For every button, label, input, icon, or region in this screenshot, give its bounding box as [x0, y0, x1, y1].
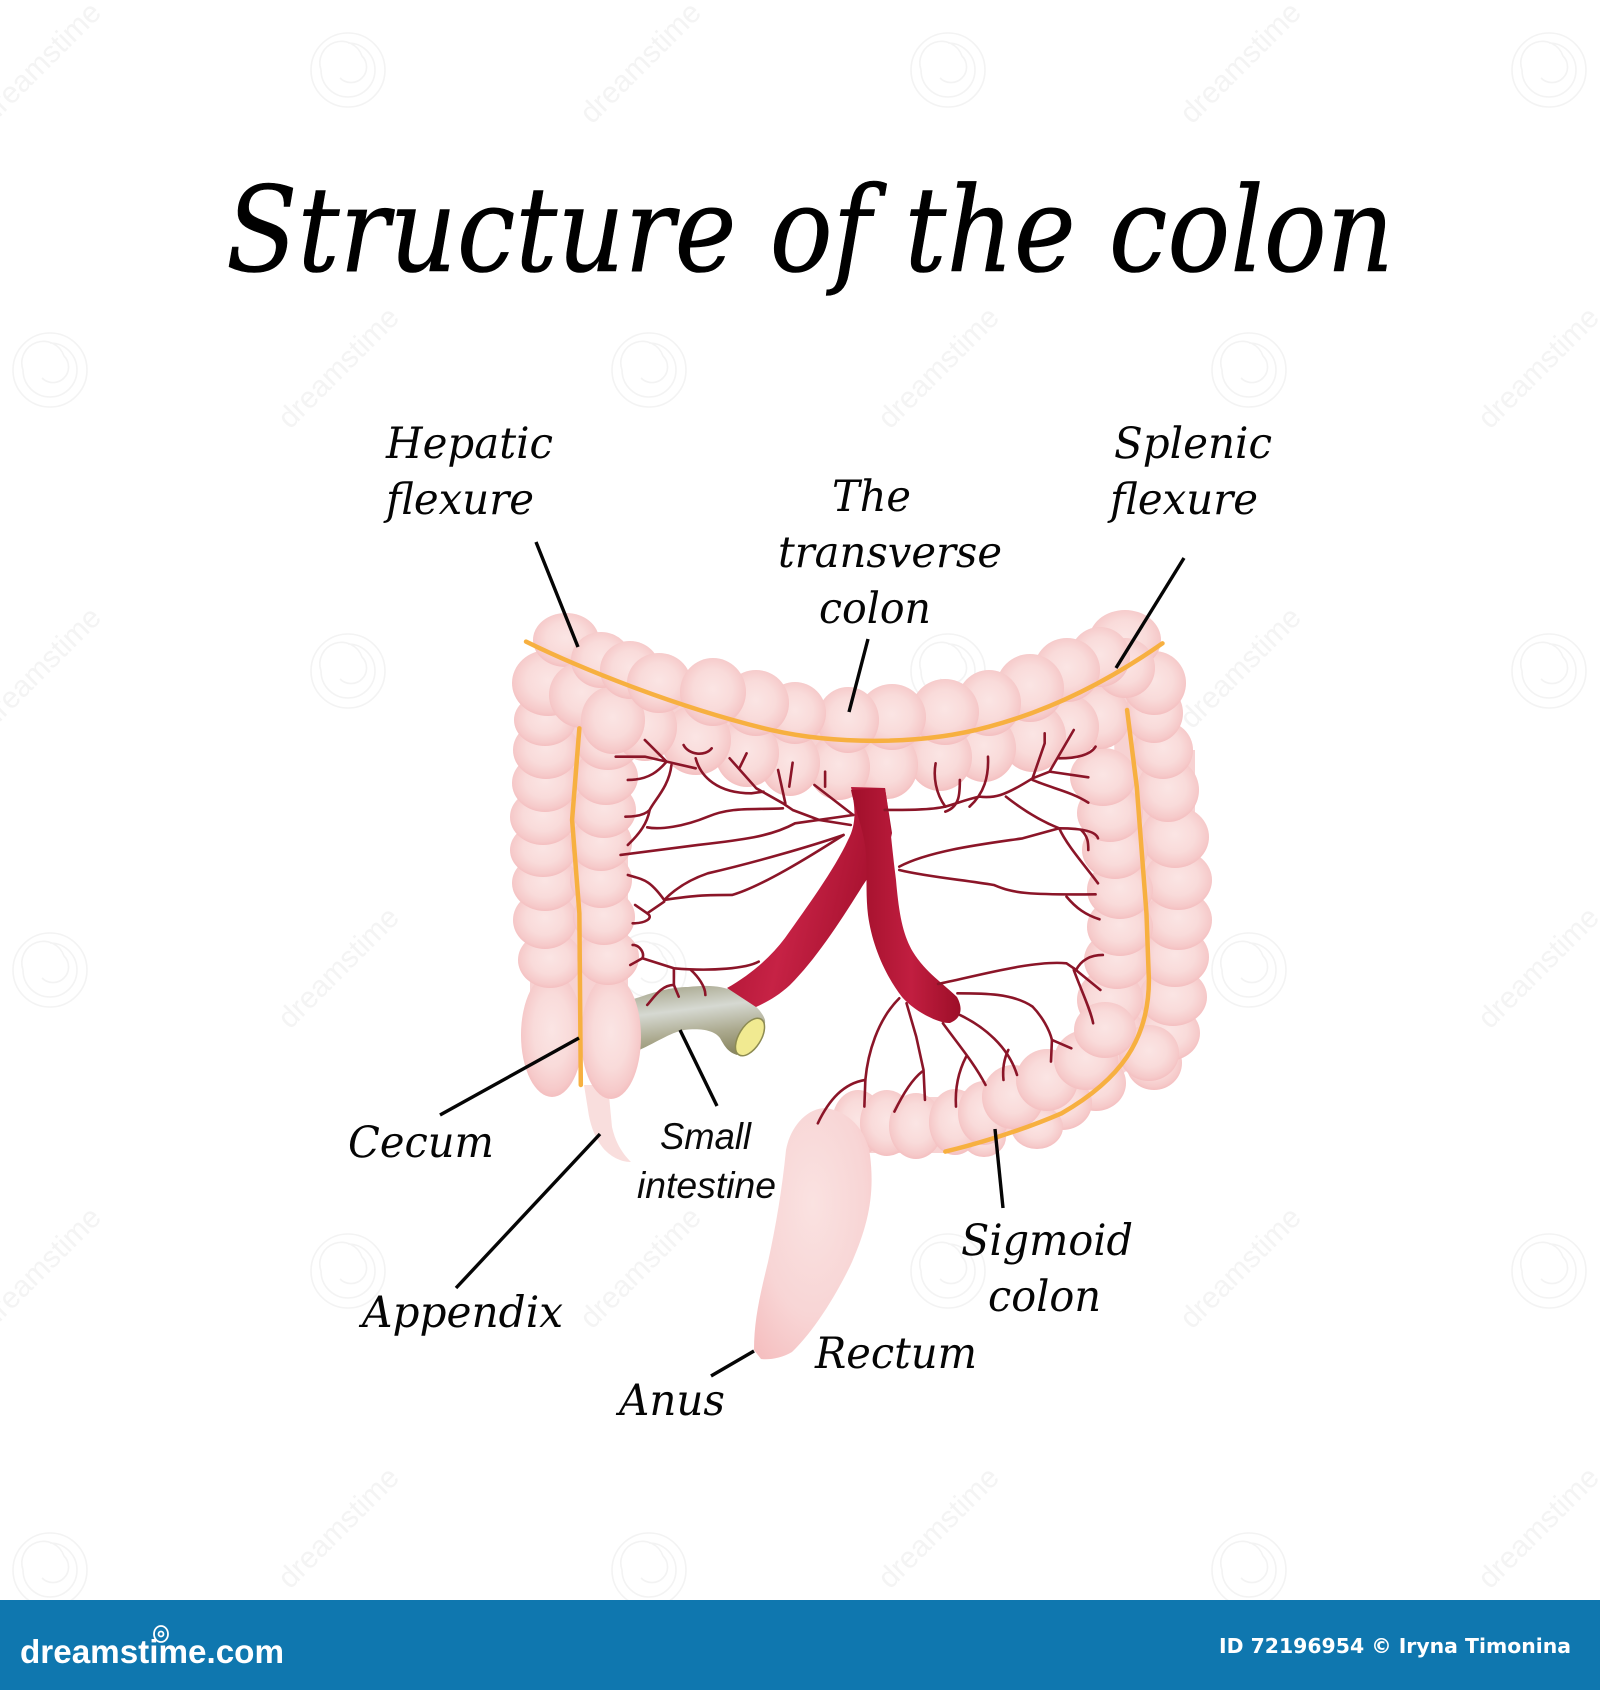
label: rectum: Rectum [814, 1329, 977, 1379]
label: transverse colon: colon [819, 584, 931, 634]
transverse colon [549, 627, 1155, 800]
footer band [0, 1600, 1600, 1690]
label: hepatic flexure: flexure [383, 475, 534, 525]
ascending colon [510, 650, 641, 1099]
descending colon [1070, 651, 1212, 1090]
watermark pattern: dreamstime [272, 1461, 406, 1595]
label: small intestine: intestine [637, 1165, 776, 1206]
label: splenic flexure: Splenic [1114, 419, 1272, 469]
hepatic flexure [533, 613, 599, 667]
watermark pattern: dreamstime [872, 301, 1006, 435]
watermark pattern: dreamstime [1174, 601, 1308, 735]
small intestine [625, 986, 770, 1061]
watermark pattern: dreamstime [272, 301, 406, 435]
label: transverse colon: The [832, 472, 911, 522]
title: Structure of the colon [226, 161, 1394, 299]
label: small intestine: Small [660, 1116, 753, 1157]
colon [510, 610, 1212, 1159]
superior mesenteric artery [727, 787, 892, 1007]
label: transverse colon: transverse [778, 528, 1002, 578]
watermark pattern: dreamstime [272, 901, 406, 1035]
label: splenic flexure: flexure [1107, 475, 1258, 525]
inferior mesenteric artery [851, 788, 961, 1023]
footer credit: ID 72196954 © Iryna Timonina [1219, 1634, 1571, 1658]
watermark pattern: dreamstime [574, 1201, 708, 1335]
leader lines [440, 542, 1184, 1376]
appendix [584, 1085, 631, 1162]
blood vessels [616, 730, 1103, 1123]
watermark pattern: dreamstime [1174, 1201, 1308, 1335]
taenia coli bands [526, 642, 1162, 1152]
icon: small intestine opening [730, 1013, 770, 1061]
footer logo text: dreamstime.com [20, 1633, 284, 1670]
rectum [754, 1108, 872, 1359]
watermark pattern: dreamstime [872, 1461, 1006, 1595]
label: anus: Anus [615, 1376, 725, 1426]
label: cecum: Cecum [348, 1118, 494, 1168]
colon body underlay [577, 690, 1145, 1125]
label: sigmoid colon: Sigmoid [961, 1216, 1133, 1266]
label: sigmoid colon: colon [988, 1272, 1101, 1322]
label: hepatic flexure: Hepatic [385, 419, 553, 469]
label: appendix: Appendix [358, 1288, 563, 1338]
icon: logo spiral [154, 1626, 168, 1642]
splenic flexure [1089, 610, 1161, 670]
sigmoid colon [832, 1002, 1179, 1159]
